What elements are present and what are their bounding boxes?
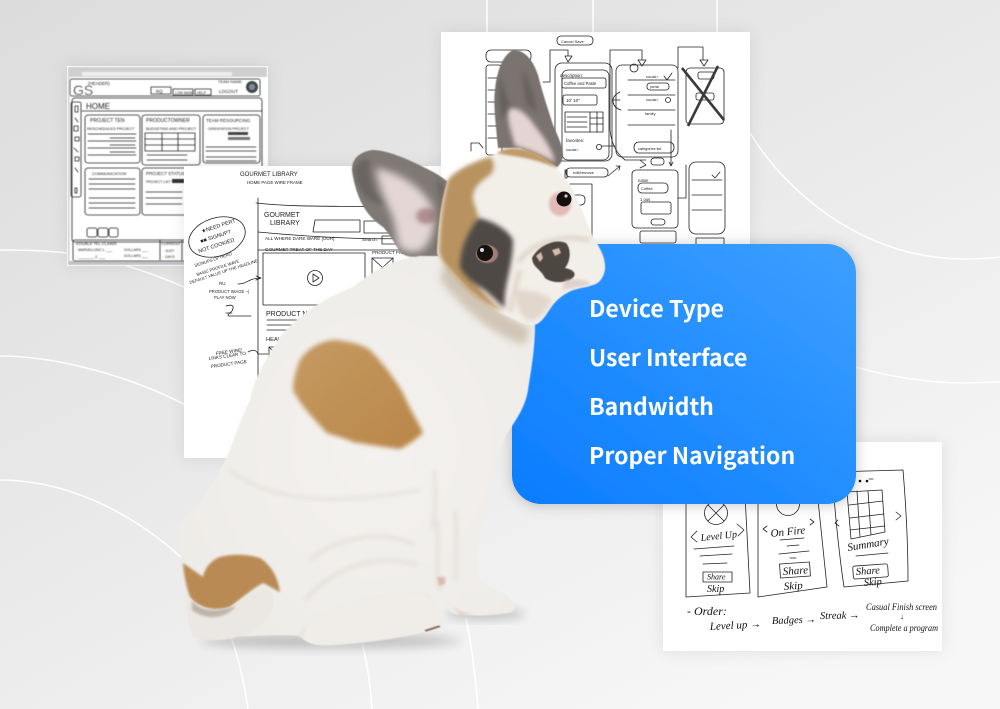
- sketch: side note bubble: FREE WIRE!: [215, 347, 243, 356]
- sketch: site wireframe: Search:: [362, 237, 378, 242]
- sketch: near-head items: [561, 170, 592, 240]
- list: bandwidth: Bandwidth: [589, 388, 714, 422]
- sketch: side note bubble: ★NEED PERT: [201, 218, 237, 235]
- sketch: screen three: Summary: [847, 536, 890, 554]
- sketch: screen one: Level Up: [699, 529, 738, 544]
- eye patch dark: [460, 218, 513, 308]
- list: user interface: User Interface: [589, 339, 747, 373]
- sketch: dashboard cards: BUDGETING AND PROJECT: [146, 127, 197, 131]
- sketch: form phone: [543, 36, 620, 177]
- sketch: lower phones: name: [638, 178, 649, 183]
- panel: mobile app flow sketch: [441, 32, 750, 292]
- dog body: [178, 250, 535, 645]
- sketch: lower phones: 1 ous: [640, 197, 650, 202]
- sketch: flow notes: Badges →: [772, 614, 816, 627]
- panel: browser dashboard wireframe sketch: [67, 66, 268, 266]
- sketch: flow notes: Complete a program: [870, 623, 938, 633]
- sketch: home row and sidebar: [71, 98, 262, 242]
- sketch: form phone: 10' 10": [566, 98, 580, 103]
- list: device type: Device Type: [589, 290, 724, 324]
- sketch: crossed-out phone: [678, 47, 724, 126]
- sketch: header: RQ: [156, 89, 163, 94]
- sketch: menu phone: cousin: [646, 74, 658, 79]
- sketch: form phone: Cancel Save: [561, 39, 584, 44]
- sketch: thumbnails and footer: · JUST: [163, 249, 175, 253]
- sketch: screen three: Share: [855, 565, 881, 578]
- sketch: lower phones: [632, 130, 725, 246]
- rear paw: [305, 593, 444, 645]
- right eye: [549, 192, 572, 216]
- sketch: header: [70, 79, 260, 98]
- sketch: flow notes: ↓: [900, 612, 904, 621]
- illustration: puppy: [178, 50, 605, 645]
- sketch: side note bubble: SIGNUPS OF HERO: [194, 251, 233, 268]
- sketch: site wireframe: GOURMET TREAT OF THE DAY: [265, 247, 333, 252]
- sketch: dashboard cards: RESCHEDULED PROJECT: [87, 127, 135, 131]
- sketch: menu phone: categories list: [638, 147, 662, 151]
- sketch: side note bubble: [184, 210, 268, 369]
- sketch: thumbnails and footer: · DAYS: [163, 255, 175, 259]
- left eye: [476, 245, 498, 263]
- sketch: thumbnails and footer: DOLLARS ___: [124, 248, 149, 252]
- left ear: [352, 150, 450, 257]
- sketch: form phone: favorites:: [566, 138, 584, 143]
- sketch: side note bubble: BASIC PROFILE WAVE: [196, 258, 240, 277]
- sketch: header: TEAM NAME: [218, 79, 242, 84]
- sketch: dashboard cards: PROJECT TEN: [90, 118, 125, 124]
- sketch: thumbnails and footer: [73, 228, 260, 261]
- sketch: flow notes: [687, 602, 938, 633]
- crown tan band: [497, 148, 559, 169]
- muzzle shading: [510, 238, 590, 312]
- sketch: dashboard cards: COMMUNICATION: [92, 171, 126, 176]
- sketch: screen one: [686, 495, 750, 597]
- mouth tint: [562, 279, 590, 290]
- sketch: lower phones: Coffee: [641, 186, 653, 191]
- sketch: side note bubble: DEFAULT VALUE UP THE HEADLINE: [189, 258, 259, 285]
- sketch: dashboard cards: · ORIENTATION PROJECT: [206, 127, 250, 131]
- sketch: form phone: cousin: [566, 147, 578, 152]
- list: proper navigation: Proper Navigation: [589, 437, 795, 471]
- front paw pink: [437, 577, 474, 615]
- nose: [532, 241, 575, 282]
- sketch: site wireframe: ALL WHERE DARE WARE [OUR]: [265, 236, 334, 241]
- sketch: screen one: Share: [707, 572, 726, 582]
- sketch: form phone: edit/remove: [573, 170, 595, 175]
- sketch: header: LOW BAND: [175, 91, 194, 95]
- sketch: form phone: Coffee and Paste: [564, 81, 597, 86]
- sketch: menu phone: cousin: [646, 97, 658, 102]
- sketch: side note bubble: ■■ SIGNUP?: [200, 229, 232, 245]
- neck shadow: [440, 262, 530, 345]
- sketch: thumbnails and footer: CURRENT: [161, 241, 181, 246]
- chin texture: [515, 290, 552, 320]
- left face tan: [439, 157, 503, 312]
- shoulder patch: [293, 340, 423, 449]
- sketch: dashboard cards: [85, 115, 260, 215]
- sketch: menu phone: family: [645, 111, 655, 116]
- sketch: flow notes: - Order:: [687, 604, 727, 618]
- sketch: page title: HOME PAGE WIRE FRAME: [247, 180, 303, 185]
- sketch: header: LOGOUT: [219, 89, 238, 94]
- sketch: screen two: On Fire: [770, 524, 806, 540]
- sketch: dashboard cards: TEAM RESOURCING: [206, 118, 251, 123]
- sketch: phone screens: [471, 36, 725, 246]
- sketch: thumbnails and footer: · MARVELLING 1. ___: [76, 248, 113, 252]
- sketch: screen three: [832, 470, 908, 589]
- sketch: thumbnails and footer: DOUBLE TEL CLAIMS: [76, 241, 117, 246]
- blue card: [512, 244, 856, 504]
- sketch: home row and sidebar: HOME: [86, 102, 110, 111]
- sketch: thumbnails and footer: · ________ 2. ___: [76, 255, 106, 259]
- sketch: side note bubble: RU: [219, 281, 226, 286]
- sketch: header: (HEADER): [88, 81, 110, 86]
- sketch: side note bubble: PLAY NOW: [214, 295, 236, 300]
- sketch: side note bubble: NOT COOKIED: [198, 238, 236, 255]
- sketch: site wireframe: LIBRARY: [270, 220, 300, 227]
- sketch: screen three: Skip: [863, 577, 882, 589]
- sketch: site wireframe: HEALTHY PRODUCTS: [266, 337, 326, 343]
- sketch: site wireframe: PRODUCT PIC: [372, 250, 404, 255]
- sketch: dashboard cards: PRODUCTOWNER: [146, 118, 190, 124]
- panel: onboarding screens sketch: [663, 442, 942, 651]
- sketch: site wireframe: PRODUCT NAME:: [266, 311, 325, 318]
- sketch: page title: GOURMET LIBRARY: [240, 172, 298, 178]
- sketch: site wireframe: GOURMET: [264, 212, 300, 219]
- tail white fur: [188, 589, 274, 640]
- sketch: thumbnails and footer: DOLLARS ___: [124, 254, 149, 258]
- panel: gourmet library wireframe sketch: [184, 166, 484, 458]
- sketch: menu phone: picnic: [650, 85, 659, 89]
- sketch: side note bubble: PRODUCT PAGE: [210, 359, 247, 369]
- sketch: flow notes: Streak →: [820, 610, 860, 622]
- sketch: flow notes: Level up →: [709, 618, 761, 633]
- sketch: form phone: description:: [560, 73, 583, 78]
- sketch: screen two: Skip: [783, 580, 804, 593]
- sketch: header: HELP: [197, 91, 207, 95]
- sketch: page title: [240, 172, 303, 185]
- sketch: header: GS: [73, 82, 93, 98]
- sketch: screen two: [758, 492, 827, 597]
- sketch: side note bubble: PRODUCT IMAGE --|: [209, 289, 249, 294]
- sketch: screen two: Share: [782, 564, 809, 578]
- browser chrome bar: [68, 67, 267, 265]
- dog head: [437, 148, 605, 325]
- sketch: menu phone: [610, 50, 678, 168]
- right ear: [494, 50, 563, 167]
- sketch: dashboard cards: PROJECT LIST: [146, 180, 171, 184]
- sketch: site wireframe: [256, 198, 420, 392]
- tail patch: [183, 555, 280, 609]
- body fur folds: [230, 470, 456, 636]
- sketch: dashboard cards: PROJECT STATUS: [146, 171, 185, 176]
- sketch: flow notes: Casual Finish screen: [866, 602, 937, 612]
- dog ground shadow: [200, 609, 525, 648]
- sketch: side note bubble: LINKS CLEAR TO: [208, 351, 247, 361]
- sketch: screen one: Skip: [707, 584, 724, 595]
- sketch: phone list left: [471, 50, 531, 155]
